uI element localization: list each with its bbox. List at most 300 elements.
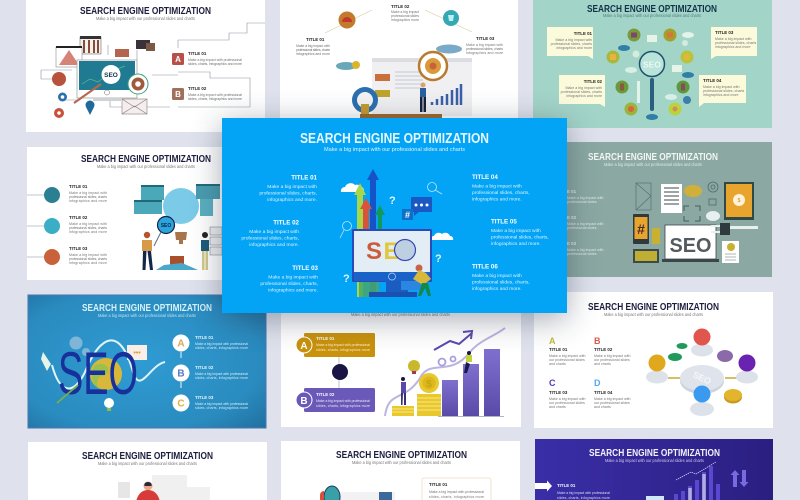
box A bbox=[296, 333, 375, 357]
subheading: Make a big impact with our professional slides and charts bbox=[351, 312, 451, 317]
badge A bbox=[172, 334, 190, 358]
swoosh line bbox=[52, 340, 165, 388]
callout: title 01: infographics and more bbox=[556, 46, 592, 50]
callout: title 02: professional slides, charts bbox=[561, 90, 602, 94]
text: title 01: Make a big impact with bbox=[267, 184, 317, 190]
callout: title 03 bbox=[711, 27, 757, 59]
icon: person bbox=[420, 82, 426, 112]
icon: chat bubbles bbox=[136, 40, 155, 51]
text: title 03: TITLE 03 bbox=[195, 395, 214, 400]
text: title 01: Make a big impact with professional bbox=[195, 342, 248, 346]
text: title 02: Make a big impact bbox=[391, 10, 419, 14]
icon: magnifier SEO bbox=[640, 52, 664, 111]
node: top bbox=[691, 328, 713, 356]
text: title 02 bbox=[195, 365, 248, 380]
faint text rows: E 02 bbox=[567, 215, 577, 220]
subheading: Make a big impact with our professional slides and charts bbox=[97, 164, 196, 169]
connector lines bbox=[325, 10, 472, 33]
callout: title 02: infographics and more bbox=[566, 94, 602, 98]
text: title 02: TITLE 02 bbox=[69, 215, 88, 220]
badge A bbox=[172, 53, 184, 65]
illustration: desk bbox=[156, 256, 198, 270]
text: title 01: professional slides, charts, bbox=[259, 190, 317, 196]
callout: title 04: Make a big impact with bbox=[703, 85, 740, 89]
arrow: green bbox=[375, 205, 385, 233]
text: title 01: professional slides, charts bbox=[69, 195, 107, 199]
slide document bbox=[372, 58, 472, 116]
item A: Make a big impact with bbox=[549, 354, 586, 358]
faint text rows: professional slides bbox=[567, 200, 597, 204]
screen bbox=[646, 496, 664, 500]
text: title 01: slides, charts, infographics more bbox=[557, 496, 610, 500]
text: title 04 bbox=[472, 174, 530, 202]
icon: speech bubble bbox=[706, 211, 720, 221]
text: title 03: TITLE 03 bbox=[476, 36, 495, 41]
text: title 02: slides, charts, infographics more bbox=[195, 376, 248, 380]
illustration: man bbox=[142, 232, 153, 270]
text: title 02 bbox=[69, 215, 107, 234]
icon: magnifier top bbox=[428, 182, 442, 194]
text: title 03: infographics and more. bbox=[268, 288, 318, 294]
item A: TITLE 01 bbox=[549, 347, 568, 352]
text: title 01: TITLE 01 bbox=[188, 51, 207, 56]
item C: TITLE 03 bbox=[549, 390, 568, 395]
illustration: server rack bbox=[210, 227, 222, 255]
lower arrow stems bbox=[359, 282, 379, 297]
heading: SEARCH ENGINE OPTIMIZATION bbox=[300, 131, 489, 147]
text: title 03 bbox=[69, 246, 107, 265]
faint text rows: professional slides bbox=[567, 226, 597, 230]
highlight bars bbox=[690, 474, 704, 500]
text: title 01: infographics and more bbox=[296, 52, 330, 56]
icon: question marks: ? bbox=[435, 253, 442, 265]
text: title 01: Make a big impact with professional bbox=[557, 491, 610, 495]
callout: title 02 bbox=[559, 75, 605, 107]
icon: target and lock bbox=[708, 182, 718, 205]
illustration: window charts bbox=[134, 184, 220, 216]
chat bubble: ••• bbox=[133, 350, 141, 357]
text: title 05: Make a big impact with bbox=[491, 228, 541, 234]
panel: slide 9 person bbox=[28, 442, 267, 500]
icon: chart window bbox=[80, 36, 101, 54]
callout: title 04: professional slides, charts bbox=[703, 89, 745, 93]
text: title 02 bbox=[391, 4, 419, 22]
item B: Make a big impact with bbox=[594, 354, 631, 358]
text: title 02: infographics and more bbox=[69, 230, 107, 234]
callout: title 03: professional slides, charts bbox=[715, 41, 757, 45]
illustration: woman bbox=[201, 232, 209, 270]
icon: mouse click bbox=[332, 364, 348, 380]
badge C bbox=[172, 394, 190, 412]
subheading: Make a big impact with our professional slides and charts bbox=[352, 460, 452, 465]
subheading: Make a big impact with our professional slides and charts bbox=[96, 16, 196, 21]
icon: title 03 bubble bbox=[27, 249, 60, 265]
bar chart bbox=[432, 84, 461, 105]
icon: chat bubble bbox=[411, 197, 432, 216]
text: title 06: Make a big impact with bbox=[472, 273, 522, 279]
subheading: Make a big impact with our professional slides and charts bbox=[604, 162, 703, 167]
person standing bbox=[401, 377, 406, 405]
bulb bbox=[408, 360, 420, 374]
callout: title 03: infographics and more bbox=[715, 45, 751, 49]
SEO letters: E bbox=[384, 238, 400, 265]
chat bubble bbox=[127, 345, 147, 360]
heading: SEARCH ENGINE OPTIMIZATION bbox=[588, 151, 718, 163]
panel: slide 1 circuit SEO bbox=[26, 0, 265, 132]
arrow bbox=[434, 331, 472, 350]
text: title 02: Make a big impact with professional bbox=[188, 93, 242, 97]
bar chart bbox=[438, 349, 504, 416]
connectors bbox=[668, 342, 747, 378]
item B: our professional slides bbox=[594, 358, 630, 362]
text: title 01: TITLE 01 bbox=[195, 335, 214, 340]
subheading: Make a big impact with our professional slides and charts bbox=[605, 458, 705, 463]
text: title 03 bbox=[466, 36, 503, 55]
badge A: A bbox=[177, 338, 185, 350]
callout: title 02: TITLE 02 bbox=[584, 79, 603, 84]
text: title 01: TITLE 01 bbox=[69, 184, 88, 189]
panel: slide 11 purple chart bbox=[535, 439, 773, 500]
text: title 02: TITLE 02 bbox=[273, 220, 300, 226]
item D: D bbox=[594, 378, 601, 388]
icon: focus frame bbox=[684, 206, 700, 221]
card: title 01: slides, charts, infographics more bbox=[429, 495, 484, 499]
icon: laptop SEO bbox=[662, 225, 719, 262]
connector bbox=[338, 357, 340, 389]
card: title 01 bbox=[422, 478, 491, 500]
text: title 06: infographics and more. bbox=[472, 286, 522, 292]
callout: title 03: Make a big impact with bbox=[715, 37, 752, 41]
subheading: Make a big impact with our professional slides and charts bbox=[98, 461, 198, 466]
icon: pie report bbox=[722, 241, 739, 263]
icon: phone hash: # bbox=[637, 221, 645, 237]
central SEO disc: SEO bbox=[691, 369, 713, 387]
heading: SEARCH ENGINE OPTIMIZATION bbox=[336, 449, 467, 461]
box A: slides, charts, infographics more bbox=[316, 348, 370, 352]
icon: document bbox=[661, 184, 682, 213]
illustration: person bbox=[136, 482, 160, 500]
illustration: lightbulb base bbox=[175, 232, 187, 244]
arrow tag bbox=[535, 480, 552, 492]
faint text rows: E 01 bbox=[567, 189, 577, 194]
text: title 03: professional slides, charts bbox=[69, 257, 107, 261]
icon: power plug bbox=[711, 223, 758, 235]
heading: SEARCH ENGINE OPTIMIZATION bbox=[587, 3, 717, 15]
text: title 02: slides, charts, infographics and more bbox=[188, 97, 242, 101]
text: title 01: infographics and more. bbox=[267, 197, 317, 203]
icon: rocket bbox=[41, 352, 51, 371]
callout: title 01: professional slides, charts bbox=[551, 42, 592, 46]
text: title 01 bbox=[259, 174, 318, 203]
text: title 04: infographics and more. bbox=[472, 196, 522, 202]
callout: title 04: TITLE 04 bbox=[703, 78, 722, 83]
faint text rows: E 03 bbox=[567, 241, 577, 246]
text: title 03: TITLE 03 bbox=[69, 246, 88, 251]
item C: C bbox=[549, 378, 556, 388]
SEO letters bbox=[366, 238, 400, 265]
heading: SEARCH ENGINE OPTIMIZATION bbox=[588, 301, 719, 313]
panel: slide 4 researcher bbox=[27, 147, 265, 280]
icon: right cloud bbox=[431, 233, 453, 240]
icon: globe bbox=[90, 358, 122, 390]
item B: TITLE 02 bbox=[594, 347, 613, 352]
icon: phone hash bbox=[633, 214, 649, 244]
box A: TITLE 01 bbox=[316, 336, 335, 341]
icon: SEO magnifier bbox=[154, 216, 174, 246]
icon: card bbox=[652, 228, 660, 244]
node: right bbox=[736, 354, 758, 384]
text: title 01 bbox=[557, 483, 610, 500]
cloud right bbox=[436, 44, 462, 54]
icon: coin bbox=[724, 389, 742, 404]
faint text rows: Make a big impact with bbox=[567, 222, 604, 226]
bulb bbox=[104, 398, 114, 411]
text: title 01: Make a big impact with professional bbox=[188, 58, 242, 62]
panel: slide 5 grey flat icons bbox=[520, 142, 772, 277]
text: title 02: Make a big impact with bbox=[69, 222, 107, 226]
icon: envelope bbox=[636, 183, 651, 210]
subheading: Make a big impact with our professional slides and charts bbox=[604, 312, 704, 317]
icon: gears bbox=[70, 336, 90, 356]
icon: gear bbox=[352, 87, 378, 114]
icon: laptop SEO: SEO bbox=[670, 235, 712, 257]
icon: magnifier left bbox=[340, 222, 352, 238]
gears bbox=[438, 356, 456, 366]
orbit icons bbox=[606, 28, 694, 116]
icon: orange gear bbox=[54, 108, 64, 118]
coin stacks bbox=[392, 373, 441, 416]
icon: tablet bbox=[724, 182, 754, 220]
text: title 02: professional slides, charts, bbox=[241, 236, 299, 242]
text: title 03: Make a big impact with bbox=[466, 43, 503, 47]
callout: title 01: TITLE 01 bbox=[574, 31, 593, 36]
box A: A bbox=[300, 341, 308, 352]
item A bbox=[549, 336, 586, 366]
icon: SEO magnifier: SEO bbox=[161, 223, 171, 229]
illustration: video cards bbox=[118, 475, 210, 500]
coin stacks: $ bbox=[426, 379, 432, 390]
icon: question marks: ? bbox=[389, 195, 396, 207]
icon: question marks: ? bbox=[343, 273, 350, 285]
icon: envelope bbox=[122, 99, 147, 114]
icon: pyramid card bbox=[56, 46, 82, 67]
item A: our professional slides bbox=[549, 358, 585, 362]
item C: our professional slides bbox=[549, 401, 585, 405]
text: title 03: Make a big impact with bbox=[268, 274, 318, 280]
icon: question marks bbox=[343, 195, 442, 285]
arrow: red bbox=[360, 198, 372, 229]
text: title 01: Make a big impact with bbox=[69, 191, 107, 195]
text: title 02: Make a big impact with bbox=[249, 229, 299, 235]
icon: gears green bbox=[668, 343, 688, 361]
item B: B bbox=[594, 336, 601, 346]
faint text rows: professional slides bbox=[567, 252, 597, 256]
illustration: SEO computer bbox=[340, 169, 453, 297]
faint text rows: Make a big impact with bbox=[567, 196, 604, 200]
callout: title 01 bbox=[547, 27, 593, 59]
text: title 03: infographics and more bbox=[466, 51, 503, 55]
text: title 05 bbox=[491, 218, 549, 247]
text: title 02: Make a big impact with professional bbox=[195, 372, 248, 376]
item B bbox=[594, 336, 631, 366]
platform bbox=[360, 114, 442, 120]
faint text rows: Make a big impact with bbox=[567, 248, 604, 252]
text: title 01: TITLE 01 bbox=[291, 174, 318, 182]
item C bbox=[549, 378, 586, 409]
wave bbox=[385, 328, 505, 416]
icon: magnifier handle bbox=[74, 84, 101, 103]
card: title 01: TITLE 01 bbox=[429, 482, 448, 487]
text: title 05: infographics and more. bbox=[491, 241, 541, 247]
item D: our professional slides bbox=[594, 401, 630, 405]
badge A: A bbox=[175, 55, 181, 64]
text: title 01: slides, charts, infographics and more bbox=[188, 62, 242, 66]
text: title 04: TITLE 04 bbox=[472, 174, 498, 181]
badge B: B bbox=[177, 368, 185, 380]
icon: title 01 bubble bbox=[27, 187, 60, 203]
text: title 02: professional slides bbox=[391, 14, 419, 18]
callout: title 02: Make a big impact with bbox=[565, 86, 602, 90]
text: title 02: TITLE 02 bbox=[391, 4, 410, 9]
icon: magnifier bbox=[320, 486, 392, 500]
callout: title 04: infographics and more bbox=[703, 93, 739, 97]
heading: SEARCH ENGINE OPTIMIZATION bbox=[80, 5, 211, 17]
box B bbox=[296, 388, 375, 412]
icon: pie bbox=[717, 350, 733, 362]
faint text rows bbox=[567, 189, 604, 256]
icon: title 02 bubble bbox=[27, 218, 60, 234]
text: title 01 bbox=[69, 184, 107, 203]
icon: target bbox=[419, 52, 447, 80]
item C: and charts bbox=[549, 405, 566, 409]
text: title 06: TITLE 06 bbox=[472, 264, 498, 270]
up and down arrows bbox=[730, 470, 748, 487]
icon: ellipse orange bbox=[684, 185, 702, 197]
subheading: Make a big impact with our professional slides and charts bbox=[98, 313, 197, 318]
icon: hash tag: # bbox=[405, 210, 410, 220]
trend line bbox=[676, 462, 716, 480]
icon: credit card bbox=[115, 49, 129, 57]
text: title 01 bbox=[188, 51, 242, 66]
box B: B bbox=[300, 396, 308, 407]
text: title 01: TITLE 01 bbox=[557, 483, 576, 488]
icon: blue gear bbox=[58, 92, 67, 102]
magnifier letter O bbox=[394, 240, 416, 260]
text: title 05: TITLE 05 bbox=[491, 218, 517, 226]
node: bottom bbox=[690, 386, 714, 416]
item D bbox=[594, 378, 631, 409]
icon: tablet: $ bbox=[738, 198, 741, 204]
panel: slide 8 isometric bbox=[534, 292, 773, 428]
item B: and charts bbox=[594, 362, 611, 366]
box B: TITLE 02 bbox=[316, 392, 335, 397]
text: title 03: Make a big impact with bbox=[69, 253, 107, 257]
heading: SEARCH ENGINE OPTIMIZATION bbox=[589, 447, 720, 459]
subheading: Make a big impact with our professional slides and charts bbox=[324, 147, 465, 153]
icon: magnifier SEO: SEO bbox=[643, 60, 661, 70]
text: title 03 bbox=[260, 265, 319, 294]
text: title 01: Make a big impact with bbox=[296, 44, 330, 48]
text: title 02 bbox=[241, 220, 300, 248]
text: title 01: slides, charts, infographics more bbox=[195, 346, 248, 350]
text: title 03: professional slides, charts bbox=[466, 47, 503, 51]
item A: and charts bbox=[549, 362, 566, 366]
item C: Make a big impact with bbox=[549, 397, 586, 401]
subheading: Make a big impact with our professional slides and charts bbox=[603, 13, 702, 18]
text: title 01: TITLE 01 bbox=[306, 37, 325, 42]
text: title 03: professional slides, charts, bbox=[260, 281, 318, 287]
bar chart bbox=[676, 466, 718, 500]
text: title 03: TITLE 03 bbox=[292, 265, 319, 272]
person sitting bbox=[464, 351, 472, 373]
badge B: B bbox=[175, 90, 181, 99]
text: title 01: professional slides, charts bbox=[296, 48, 330, 52]
box B: slides, charts, infographics more bbox=[316, 404, 370, 408]
icon: orange circle bbox=[338, 12, 356, 28]
text: title 02: TITLE 02 bbox=[188, 86, 207, 91]
icon: monitor SEO bbox=[77, 60, 137, 101]
item A: A bbox=[549, 336, 556, 346]
text: title 01: infographics and more bbox=[69, 199, 107, 203]
icon: person bbox=[413, 264, 431, 296]
item D: TITLE 04 bbox=[594, 390, 613, 395]
panel: slide 6 blue SEO bbox=[27, 294, 267, 429]
arrow: lime bbox=[354, 183, 366, 297]
icon: map pin bbox=[86, 100, 94, 115]
central SEO disc bbox=[680, 365, 724, 394]
node: left bbox=[646, 354, 668, 384]
panel: featured slide bbox=[222, 118, 567, 313]
box B: Make a big impact with professional bbox=[316, 399, 370, 403]
icon: phone bbox=[52, 72, 66, 86]
text: title 04: Make a big impact with bbox=[472, 184, 522, 190]
monitor bbox=[352, 229, 432, 297]
callout: title 03: TITLE 03 bbox=[715, 30, 734, 35]
icon: target bbox=[128, 74, 148, 94]
text: title 03 bbox=[195, 395, 248, 410]
callout: title 04 bbox=[699, 75, 746, 107]
icon: teal circle bbox=[443, 10, 459, 26]
text: title 04: professional slides, charts, bbox=[472, 190, 530, 196]
text: title 06: professional slides, charts, bbox=[472, 280, 530, 286]
badge B bbox=[172, 364, 190, 388]
panel: slide 2 gear and target bbox=[280, 0, 518, 138]
heading: SEARCH ENGINE OPTIMIZATION bbox=[82, 302, 212, 314]
arrow: blue tall bbox=[367, 169, 379, 297]
icon: cloud and bulb bbox=[336, 61, 360, 70]
text: title 06 bbox=[472, 264, 530, 292]
box A: Make a big impact with professional bbox=[316, 343, 370, 347]
panel: slide 7 growth bars bbox=[281, 290, 521, 427]
badge B bbox=[172, 88, 184, 100]
icon: left cloud bbox=[341, 183, 364, 192]
orbit clouds bbox=[618, 32, 694, 120]
magnifier stem bbox=[57, 385, 78, 403]
text: title 05: professional slides, charts, bbox=[491, 234, 549, 240]
callout: title 01: Make a big impact with bbox=[555, 38, 592, 42]
centre shadow bbox=[222, 124, 567, 319]
panel: slide 3 magnifier bbox=[533, 0, 772, 128]
illustration: large circle bbox=[163, 188, 199, 224]
text: title 03: slides, charts, infographics more bbox=[195, 406, 248, 410]
text: title 02: infographics more bbox=[391, 18, 419, 22]
SEO letters: S bbox=[366, 238, 382, 265]
text: title 03: infographics and more bbox=[69, 261, 107, 265]
text: title 02: TITLE 02 bbox=[195, 365, 214, 370]
text: title 02: professional slides, charts bbox=[69, 226, 107, 230]
card: title 01: Make a big impact with professional bbox=[429, 490, 484, 494]
heading: SEARCH ENGINE OPTIMIZATION bbox=[82, 450, 213, 462]
